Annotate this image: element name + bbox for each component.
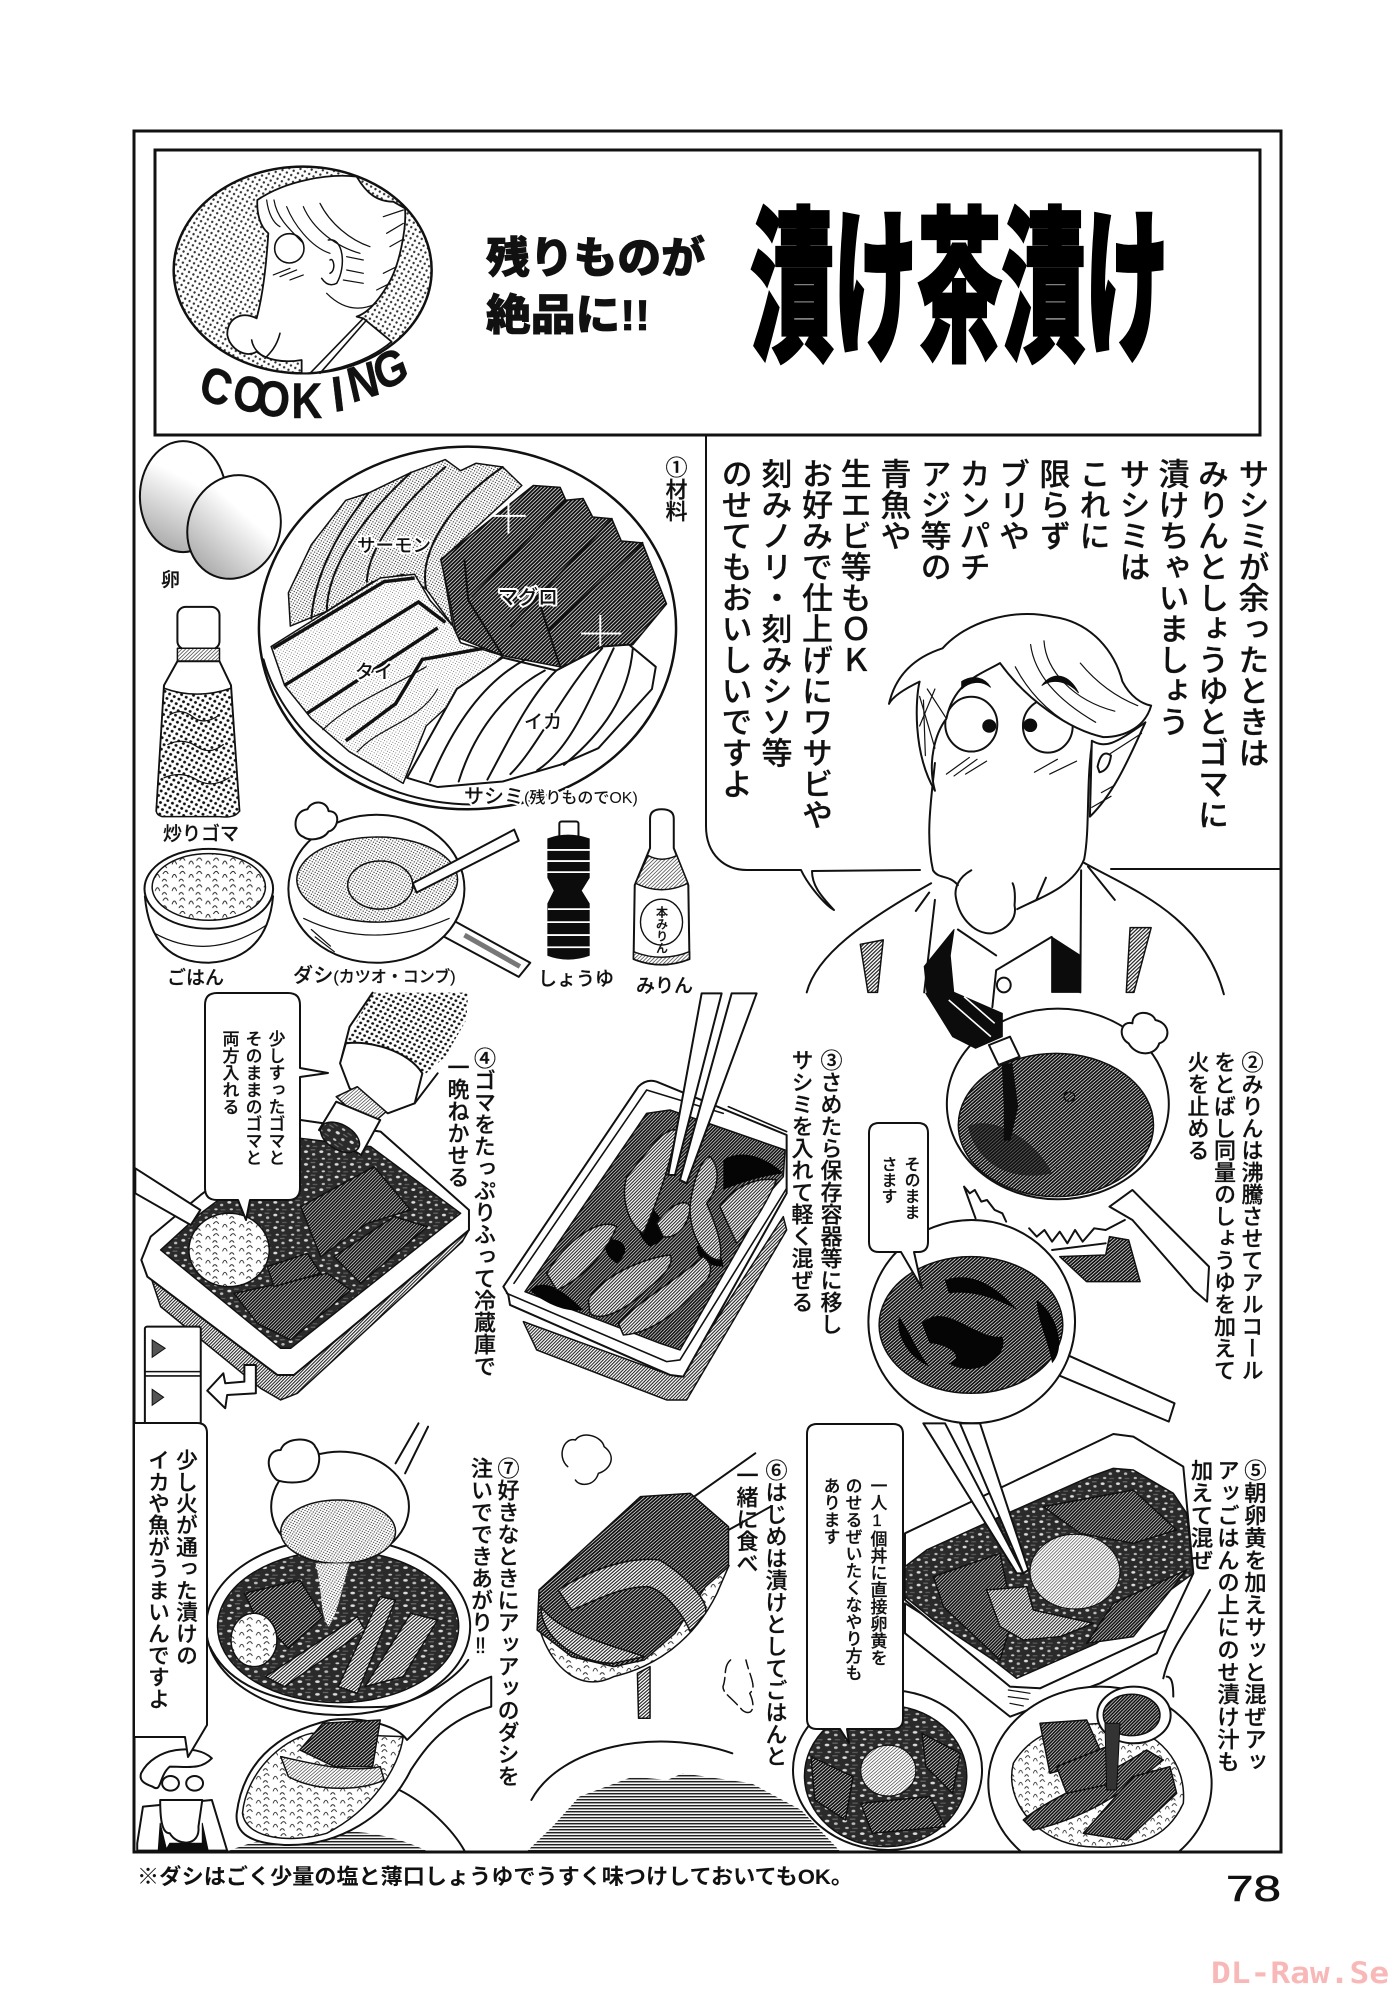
page number: 78 [1226, 1868, 1281, 1909]
sashimi plate [259, 447, 676, 809]
soy sauce bottle and stream [926, 992, 1020, 1140]
step 5 text: 加えて混ぜ [1188, 1459, 1213, 1571]
speech bubble: sesame tip: 両方入れる [220, 1030, 239, 1115]
ingredient labels: ダシ(カツオ・コンブ) [293, 964, 456, 987]
tuna slices [441, 486, 666, 667]
small chef figure [137, 1749, 227, 1851]
step 5: rice bowl with sashimi [988, 1590, 1212, 1880]
speech bubble: sesame tip [205, 993, 328, 1220]
step 6 text [734, 1459, 788, 1767]
tray rice and sashimi [161, 1138, 461, 1348]
tray base [905, 1603, 1177, 1717]
speech text: chef explanation: 青魚や [876, 458, 910, 551]
squid slices [407, 645, 656, 787]
speech text: chef explanation: 生エビ等もＯＫ [836, 458, 871, 675]
mirin label text: 本みりん [654, 906, 668, 954]
speech text: chef explanation: 限らず [1034, 458, 1070, 551]
step 5: spoon [1097, 1590, 1210, 1790]
footnote: ※ダシはごく少量の塩と薄口しょうゆでうすく味つけしておいてもOK。 [137, 1864, 853, 1889]
speech text: chef explanation [716, 458, 1269, 830]
step 5 text: ⑤朝卵黄を加えサッと混ぜアッ [1242, 1459, 1267, 1773]
steps 7 illustrations [137, 1423, 839, 1851]
title: 漬け茶漬け [750, 197, 1169, 382]
step 7 text [468, 1457, 520, 1787]
subtitle: 残りものが [486, 234, 705, 283]
step 5: tray with yolk [905, 1423, 1193, 1717]
tray base [523, 1217, 787, 1400]
ingredient labels: マグロ [498, 586, 558, 609]
step 2 text [1184, 1051, 1264, 1381]
speech bubble: yolk per bowl: あります [820, 1477, 840, 1545]
ingredient labels [161, 535, 693, 997]
ingredient labels: ごはん [167, 967, 224, 989]
chef body with apron [807, 863, 1226, 1011]
step 4 text: ④ゴマをたっぷりふって冷蔵庫で [471, 1047, 496, 1377]
ingredient labels: 卵 [161, 569, 180, 591]
speech bubble: yolk per bowl: 一人1個丼に直接卵黄を [868, 1477, 887, 1666]
ingredient labels: しょうゆ [538, 968, 614, 990]
ingredient labels: サシミ(残りものでOK) [464, 786, 638, 808]
step 6 text: ⑥はじめは漬けとしてごはんと [762, 1459, 788, 1767]
step 2 text: をとばし同量のしょうゆを加えて [1211, 1051, 1236, 1381]
step 2: saucepan with mirin [947, 1009, 1209, 1302]
speech bubble: cool as is: さます [878, 1156, 896, 1204]
illustrations layer [135, 441, 1226, 1880]
outer page frame [134, 131, 1281, 1852]
subtitle [486, 234, 705, 340]
curved COOKING label: COOKING [194, 335, 415, 429]
icon: dashi pan [288, 803, 530, 977]
icon: rice bowl [144, 849, 273, 963]
icon: cooking chef portrait [174, 167, 432, 373]
tray rim [503, 1081, 787, 1377]
step 2 text: 火を止める [1184, 1051, 1210, 1161]
step 3: sashimi tray [503, 993, 787, 1400]
step 7: ladle pouring dashi [271, 1423, 428, 1627]
steps 5 and 6 illustrations [723, 1660, 753, 1713]
icon: soy sauce bottle [547, 821, 590, 959]
speech bubble: sesame tip: 少しすったゴマと [266, 1030, 285, 1166]
icon: eggs [138, 440, 282, 580]
subtitle: 絶品に!! [486, 292, 650, 340]
speech text: chef explanation: 漬けちゃいましょう [1154, 458, 1188, 737]
step 7 text: 注いでできあがり‼ [468, 1457, 493, 1658]
chef portrait [807, 614, 1226, 1011]
panel: title banner [155, 150, 1260, 435]
step 3 text: サシミを入れて軽く混ぜる [788, 1049, 814, 1313]
speech text: chef explanation: サシミが余ったときは [1234, 458, 1269, 768]
step 2b: saucepan cooling [868, 1220, 1175, 1423]
step 6: food held by chopsticks [537, 1453, 771, 1718]
lower-left bowl, stripes [229, 1790, 464, 1851]
step 3 text [788, 1049, 842, 1335]
speech text: chef explanation: カンパチ [954, 458, 990, 582]
step 4 text [444, 1047, 496, 1377]
speech bubble: yolk per bowl: のせるぜいたくなやり方も [842, 1477, 862, 1681]
lower-middle bowl, stripes [528, 1742, 839, 1851]
icon: mirin bottle [634, 809, 689, 965]
icon: steam squiggle [723, 1660, 753, 1713]
speech text: chef explanation: アジ等の [916, 458, 951, 582]
step 2: burner and flame [964, 1187, 1140, 1282]
speech bubble: cool as is: そのまま [902, 1156, 920, 1220]
watermark: DL-Raw.Se [1211, 1956, 1389, 1990]
tray sashimi [525, 1110, 785, 1350]
ingredient labels: 炒りゴマ [163, 822, 239, 845]
speech text: chef explanation: みりんとしょうゆとゴマに [1193, 458, 1228, 830]
sesame spoon [135, 1168, 269, 1287]
tray food [905, 1468, 1193, 1678]
step 7: spoon with rice [237, 1677, 491, 1845]
speech bubble: yolk per bowl [807, 1424, 903, 1743]
step 7: bowl [206, 1538, 470, 1715]
step 6 text: 一緒に食べ [734, 1464, 758, 1574]
speech bubble: squid and fish: 少し火が通った漬けの [174, 1449, 198, 1666]
speech bubble: cool as is [869, 1123, 928, 1288]
speech bubble: chef explanation outline [706, 435, 1280, 910]
step 1 heading: ①材料 [662, 456, 688, 522]
speech text: chef explanation: お好みで仕上げにワサビや [797, 458, 832, 830]
icon: steam cloud [1122, 1013, 1167, 1053]
sesame bottle pouring [314, 993, 468, 1159]
step 7 text: ⑦好きなときにアッアッのダシを [494, 1457, 520, 1787]
refrigerator icon [145, 1327, 201, 1427]
icon: steam cloud [269, 1440, 319, 1482]
chopsticks [923, 1423, 1028, 1573]
ingredient labels: イカ [524, 712, 562, 733]
chef head [889, 614, 1151, 933]
speech text: chef explanation: ブリや [994, 458, 1029, 551]
tray rim [905, 1434, 1193, 1688]
step 3 text: ③さめたら保存容器等に移し [818, 1049, 842, 1335]
icon: steam cloud [562, 1435, 611, 1484]
sea bream slices [271, 574, 503, 783]
arrow: into fridge [207, 1365, 256, 1408]
step 4: tray with sesame [141, 1120, 469, 1400]
speech bubble: squid and fish: イカや魚がうまいんですよ [146, 1449, 170, 1709]
step 5 text: アッごはんの上にのせ漬け汁も [1214, 1459, 1240, 1773]
ingredient labels: みりん [636, 976, 693, 997]
step 5 text [1188, 1459, 1267, 1773]
steps 2 and 3 pans [868, 992, 1209, 1423]
ingredients illustrations [140, 441, 689, 977]
step 6: bowl with yolk [793, 1690, 982, 1850]
speech text: chef explanation: のせてもおいしいですよ [716, 458, 752, 799]
ingredient labels: タイ [355, 661, 393, 683]
tray body [151, 1230, 469, 1400]
icon: steam [296, 803, 337, 839]
step 4 text: 一晩ねかせる [444, 1056, 470, 1188]
ingredient labels: サーモン [357, 535, 431, 556]
salmon slices [288, 460, 522, 626]
icon: sesame bottle [156, 607, 239, 817]
step 2 text: ②みりんは沸騰させてアルコール [1238, 1051, 1264, 1381]
speech text: chef explanation: 刻みノリ・刻みシソ等 [756, 458, 792, 768]
chopsticks [668, 993, 757, 1183]
speech text: chef explanation: サシミは [1114, 458, 1150, 582]
tray rim [141, 1120, 469, 1375]
speech bubble: sesame tip: そのままのゴマと [242, 1030, 262, 1166]
speech text: chef explanation: これに [1074, 458, 1110, 551]
speech bubble: squid and fish [134, 1423, 207, 1757]
